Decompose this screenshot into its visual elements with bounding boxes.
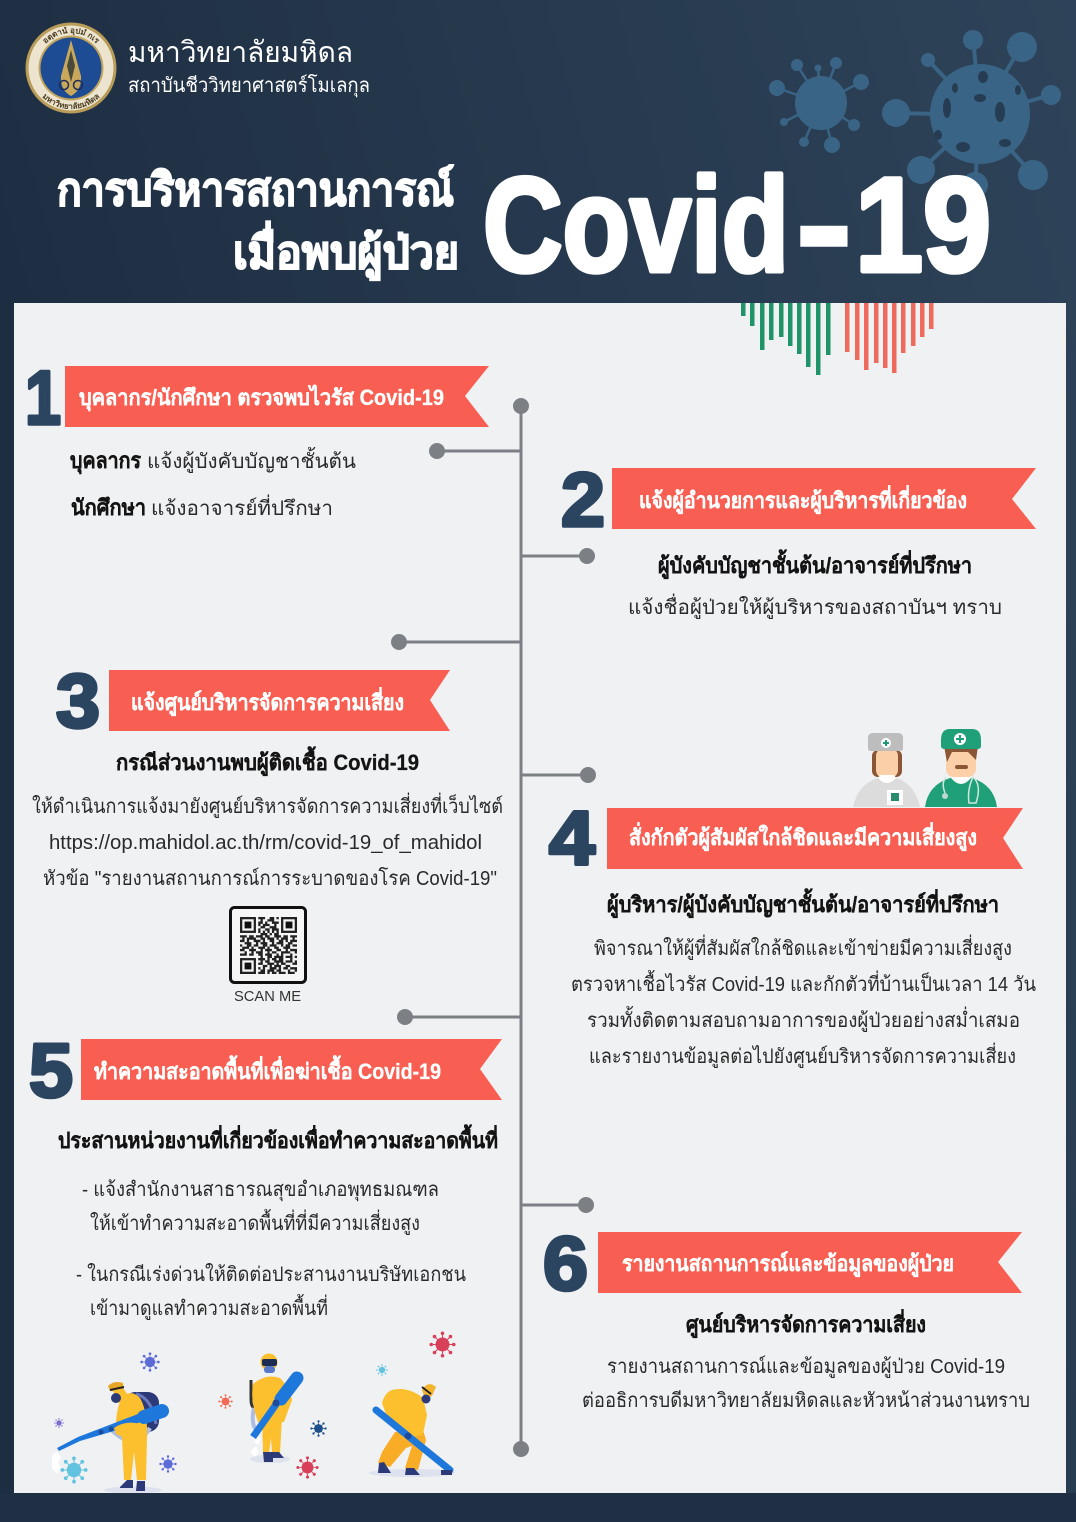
icon: doctor (925, 729, 997, 807)
step 1 (25, 356, 489, 520)
step 5: ประสานหน่วยงานที่เกี่ยวข้องเพื่อทำความสะอาดพื้นที่ (58, 1124, 498, 1153)
step 4: 4 (549, 796, 595, 881)
step 2: แจ้งชื่อผู้ป่วยให้ผู้บริหารของสถาบันฯ ทราบ (628, 593, 1002, 620)
step 4: พิจารณาให้ผู้ที่สัมผัสใกล้ชิดและเข้าข่ายมีความเสี่ยงสูง (594, 934, 1012, 961)
organisation name (128, 37, 370, 98)
title: เมื่อพบผู้ป่วย (233, 221, 459, 281)
title: Covid (483, 151, 789, 300)
step 4: รวมทั้งติดตามสอบถามอาการของผู้ป่วยอย่างสม่ำเสมอ (587, 1006, 1020, 1033)
illustration: sprayer worker 1 (52, 1382, 162, 1494)
step 6: รายงานสถานการณ์และข้อมูลของผู้ป่วย (622, 1251, 954, 1278)
step 5 (29, 1029, 502, 1321)
step 3: https://op.mahidol.ac.th/rm/covid-19_of_mahidol (49, 832, 482, 854)
step 1: นักศึกษา (71, 495, 146, 520)
decorative bars: green (741, 303, 830, 375)
step 4: ผู้บริหาร/ผู้บังคับบัญชาชั้นต้น/อาจารย์ที่ปรึกษา (607, 888, 999, 919)
step 5: 5 (29, 1029, 73, 1114)
icon: large virus (882, 30, 1061, 198)
illustration: sprayer worker 3 (369, 1384, 455, 1477)
step 6: ต่ออธิการบดีมหาวิทยาลัยมหิดลและหัวหน้าส่วนงานทราบ (582, 1390, 1030, 1412)
step 4: ตรวจหาเชื้อไวรัส Covid-19 และกักตัวที่บ้านเป็นเวลา 14 วัน (571, 970, 1036, 996)
step 6: ศูนย์บริหารจัดการความเสี่ยง (686, 1308, 926, 1339)
main content panel (14, 303, 1066, 1493)
step 1: แจ้งอาจารย์ที่ปรึกษา (151, 494, 333, 520)
step 3: ให้ดำเนินการแจ้งมายังศูนย์บริหารจัดการความเสี่ยงที่เว็บไซต์ (32, 792, 503, 819)
step 5: ให้เข้าทำความสะอาดพื้นที่ที่มีความเสี่ยงสูง (90, 1209, 420, 1236)
QR code (230, 908, 306, 982)
footer band (0, 1493, 1076, 1522)
title: 19 (855, 151, 991, 300)
QR caption: SCAN ME (234, 988, 301, 1005)
step 1: แจ้งผู้บังคับบัญชาชั้นต้น (147, 447, 356, 474)
step 5: - แจ้งสำนักงานสาธารณสุขอำเภอพุทธมณฑล (82, 1179, 439, 1202)
step 4: สั่งกักตัวผู้สัมผัสใกล้ชิดและมีความเสี่ยงสูง (629, 821, 977, 852)
icon: small virus (769, 57, 869, 153)
decorative bars: red (845, 303, 934, 373)
step 5: - ในกรณีเร่งด่วนให้ติดต่อประสานงานบริษัทเอกชน (76, 1263, 466, 1286)
step 2: ผู้บังคับบัญชาชั้นต้น/อาจารย์ที่ปรึกษา (658, 549, 972, 580)
step 2: แจ้งผู้อำนวยการและผู้บริหารที่เกี่ยวข้อง (639, 484, 967, 515)
step 5: เข้ามาดูแลทำความสะอาดพื้นที่ (90, 1294, 328, 1321)
timeline (391, 398, 596, 1457)
icon: nurse (853, 733, 920, 807)
step 3: 3 (56, 659, 100, 744)
step 3: หัวข้อ "รายงานสถานการณ์การระบาดของโรค Covid-19" (43, 867, 497, 890)
logo: Mahidol University seal: มหาวิทยาลัยมหิดล (42, 94, 100, 110)
title: การบริหารสถานการณ์ (57, 164, 454, 215)
step 6 (543, 1222, 1030, 1412)
illustration: sprayer worker 2 (250, 1354, 297, 1463)
step 5: ทำความสะอาดพื้นที่เพื่อฆ่าเชื้อ Covid-19 (94, 1055, 441, 1084)
logo: Mahidol University seal: อตฺตานํ อุปมํ กเร (43, 26, 100, 44)
organisation name: มหาวิทยาลัยมหิดล (128, 37, 353, 69)
step 1: 1 (25, 356, 61, 441)
step 2: 2 (561, 458, 605, 543)
step 1: บุคลากร/นักศึกษา ตรวจพบไวรัส Covid-19 (79, 384, 444, 412)
organisation name: สถาบันชีววิทยาศาสตร์โมเลกุล (128, 74, 370, 98)
step 1: บุคลากร (70, 448, 141, 475)
logo: Mahidol University seal (26, 22, 116, 114)
step 4 (549, 796, 1036, 1069)
step 3 (32, 659, 503, 890)
step 2 (561, 458, 1036, 620)
step 6: 6 (543, 1222, 588, 1307)
step 4: และรายงานข้อมูลต่อไปยังศูนย์บริหารจัดการความเสี่ยง (589, 1042, 1016, 1069)
step 3: กรณีส่วนงานพบผู้ติดเชื้อ Covid-19 (116, 746, 419, 777)
step 3: แจ้งศูนย์บริหารจัดการความเสี่ยง (131, 686, 404, 717)
title (57, 151, 991, 300)
icons: floating germs (54, 1331, 456, 1484)
title: - (797, 151, 851, 300)
step 6: รายงานสถานการณ์และข้อมูลของผู้ป่วย Covid-19 (607, 1355, 1005, 1379)
